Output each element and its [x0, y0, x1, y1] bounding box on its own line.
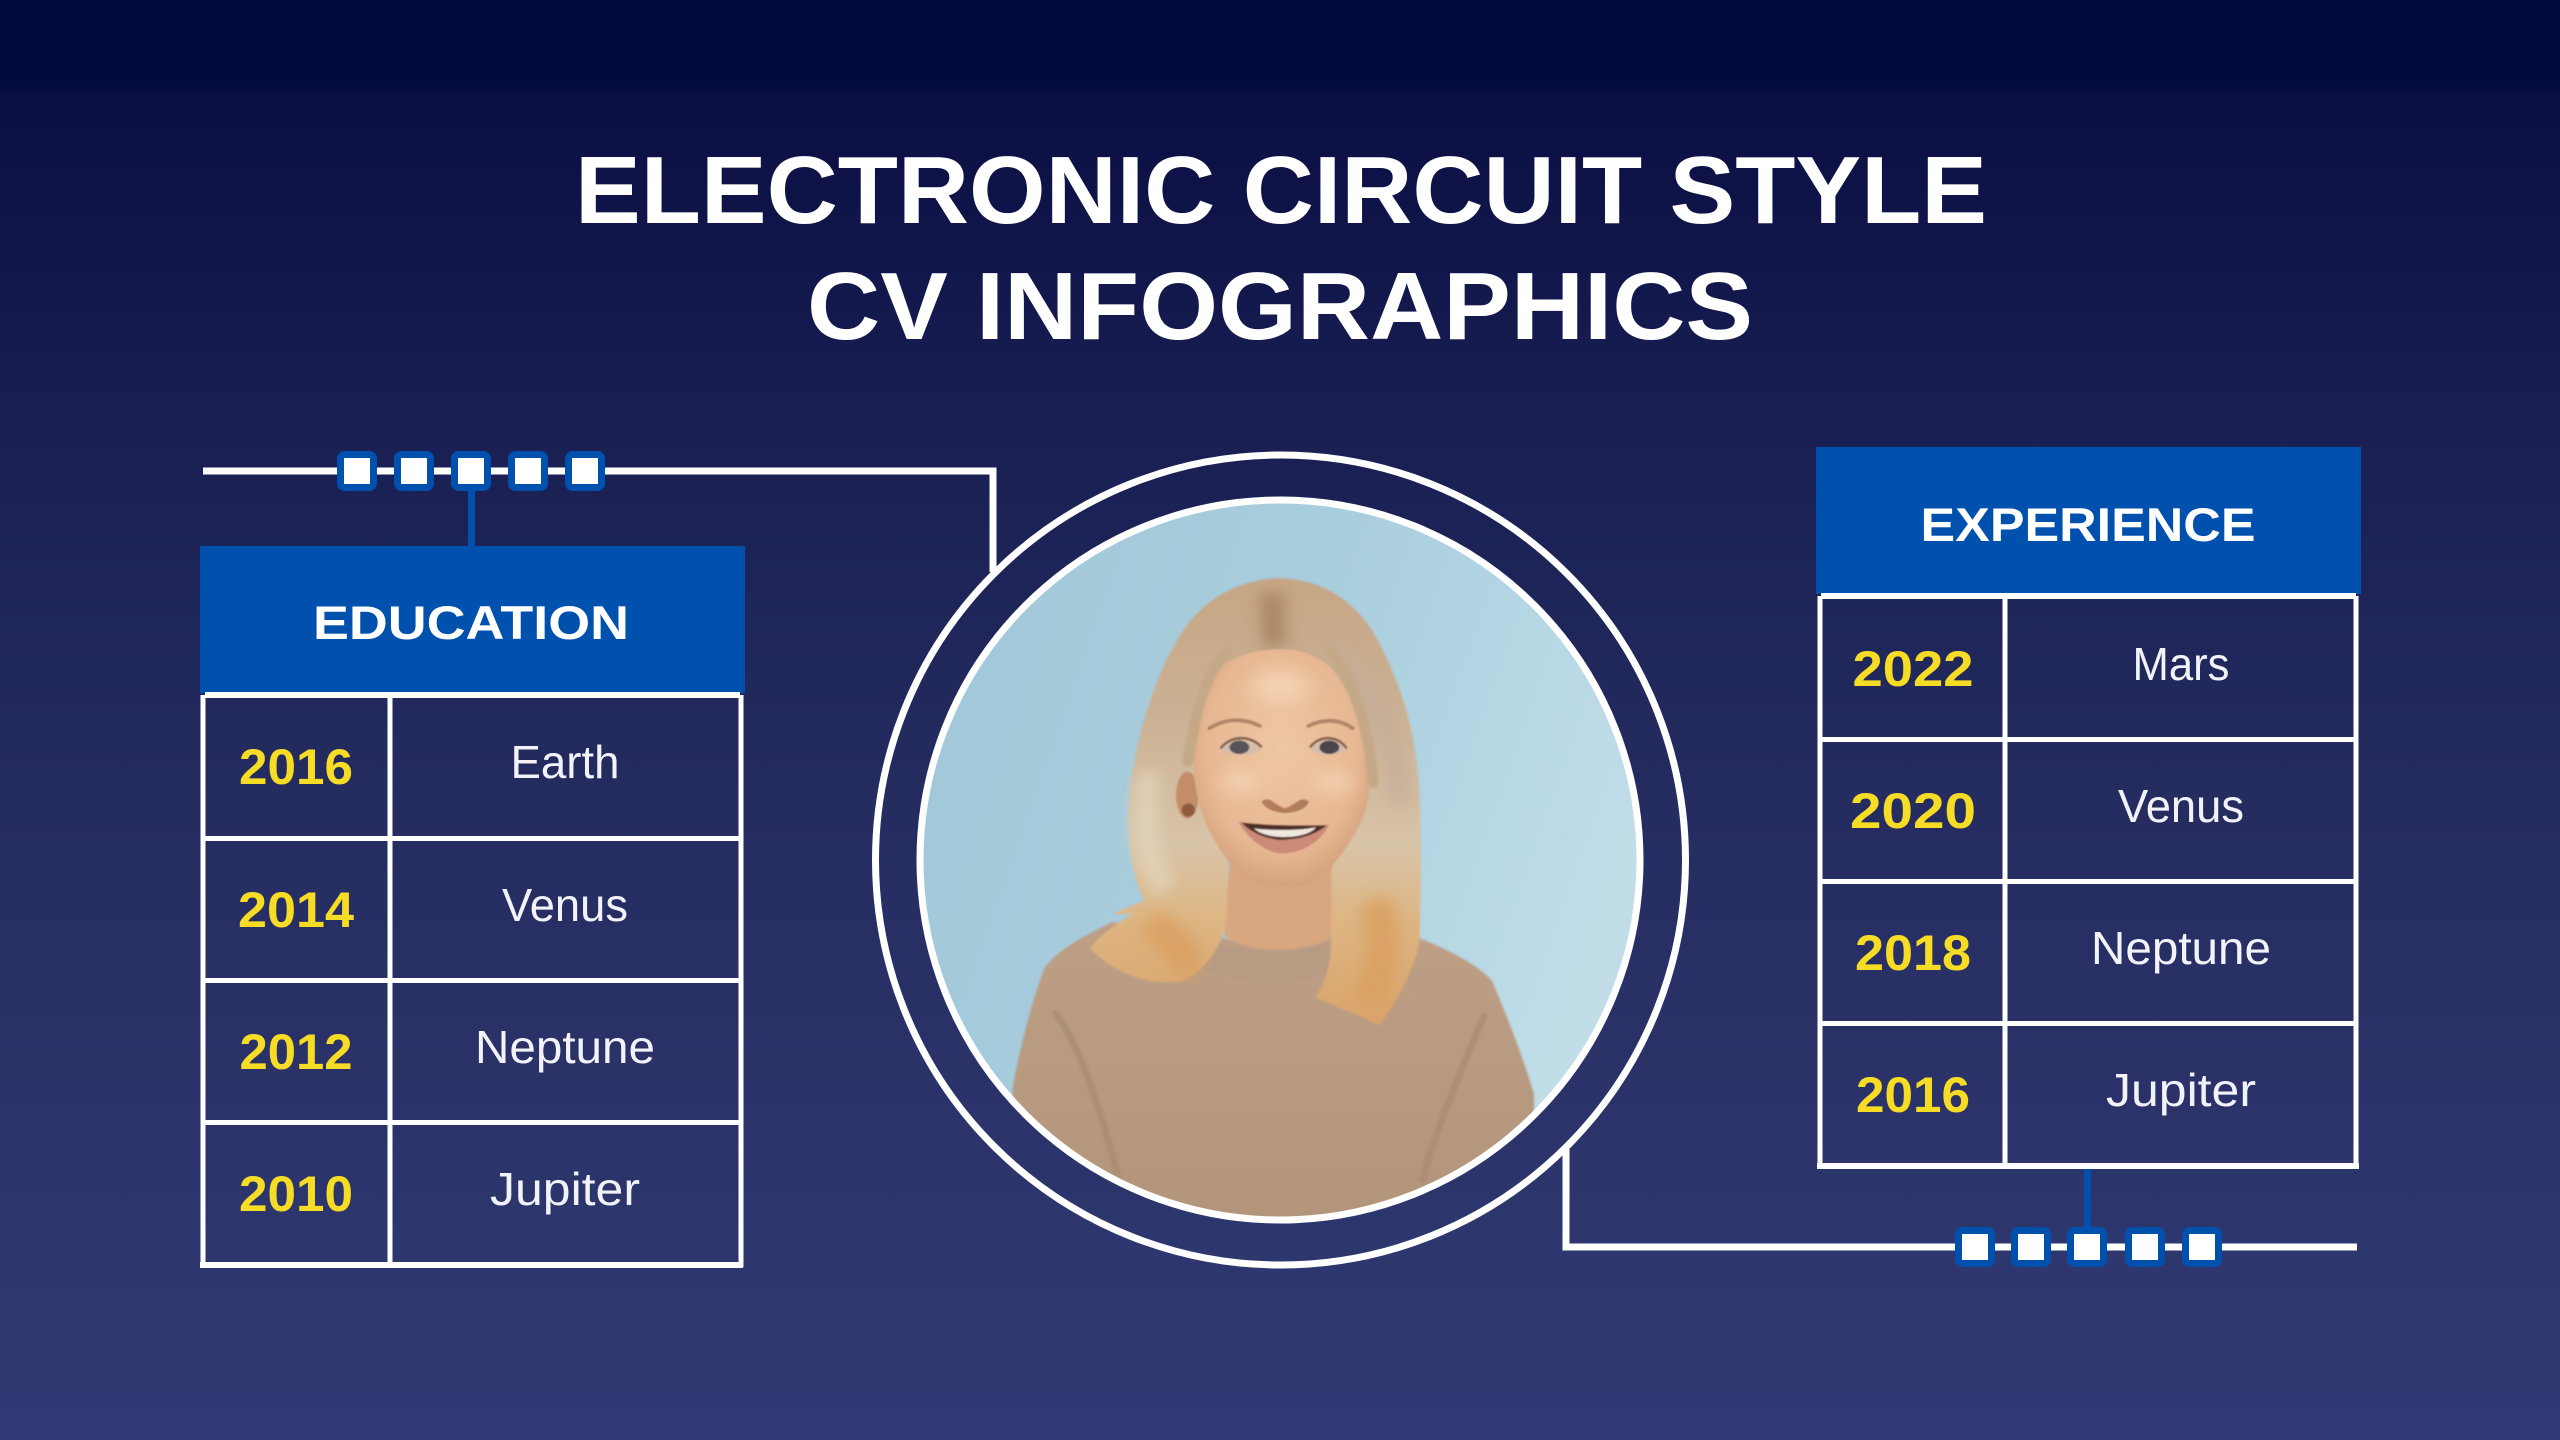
- stem: education header link: [468, 490, 475, 548]
- ear and earring: [1176, 772, 1199, 818]
- circuit connector: education to portrait: [203, 454, 993, 572]
- inner ring: [920, 500, 1640, 1220]
- eyebrows: [1209, 720, 1353, 728]
- resistor nodes: experience: [1958, 1230, 2218, 1264]
- experience row 2018: [1855, 922, 2271, 981]
- experience row 2016: 2016: [1856, 1067, 1970, 1123]
- experience row 2020: [1850, 780, 2244, 839]
- education row 2016: 2016: [239, 739, 353, 795]
- nose: [1262, 799, 1309, 813]
- education row 2014: Venus: [502, 879, 628, 931]
- smile: [1238, 822, 1329, 853]
- sweater collar: [1203, 936, 1342, 983]
- panel: education: [200, 546, 745, 1268]
- education header: [200, 546, 745, 693]
- education row 2014: 2014: [238, 882, 354, 938]
- panel: experience: [1816, 447, 2361, 1169]
- education table grid: [200, 692, 744, 1268]
- experience row 2022: [1852, 638, 2230, 697]
- outer ring: [876, 455, 1686, 1265]
- title: [575, 137, 1987, 360]
- experience row 2018: Neptune: [2091, 922, 2271, 974]
- experience row 2022: 2022: [1852, 641, 1974, 697]
- education row 2012: Neptune: [475, 1021, 655, 1073]
- education row 2010: [239, 1163, 640, 1222]
- skin highlights: [1220, 670, 1353, 792]
- experience row 2022: Mars: [2132, 638, 2230, 690]
- experience row 2020: 2020: [1850, 783, 1976, 839]
- title: CV INFOGRAPHICS: [807, 253, 1753, 360]
- experience row 2016: Jupiter: [2106, 1064, 2256, 1116]
- experience header: EXPERIENCE: [1920, 498, 2256, 551]
- resistor nodes: education: [340, 454, 602, 488]
- hair: [1090, 578, 1421, 1025]
- experience row 2020: Venus: [2118, 780, 2244, 832]
- portrait photo illustration: [924, 504, 1636, 1216]
- education row 2016: Earth: [510, 736, 620, 788]
- education row 2012: [240, 1021, 655, 1080]
- education header: EDUCATION: [313, 596, 629, 649]
- experience row 2016: [1856, 1064, 2256, 1123]
- experience header: [1816, 447, 2361, 594]
- education row 2012: 2012: [240, 1024, 352, 1080]
- education row 2010: Jupiter: [490, 1163, 640, 1215]
- experience table grid: [1817, 593, 2359, 1169]
- sweater: [1013, 922, 1534, 1244]
- stem: experience table link: [2084, 1168, 2091, 1230]
- education row 2014: [238, 879, 628, 938]
- education row 2016: [239, 736, 620, 795]
- neck: [1224, 858, 1334, 950]
- sweater creases: [1056, 1013, 1484, 1179]
- hair highlights: [1146, 593, 1401, 1002]
- face: [1176, 649, 1369, 887]
- experience row 2018: 2018: [1855, 925, 1971, 981]
- title: ELECTRONIC CIRCUIT STYLE: [575, 137, 1987, 244]
- inner hair strands over face edges: [1188, 652, 1373, 783]
- circuit connector: experience to portrait: [1566, 1148, 2357, 1264]
- education row 2010: 2010: [239, 1166, 353, 1222]
- eyes: [1221, 738, 1347, 755]
- face shape: [1193, 649, 1369, 887]
- figure: [1013, 578, 1534, 1244]
